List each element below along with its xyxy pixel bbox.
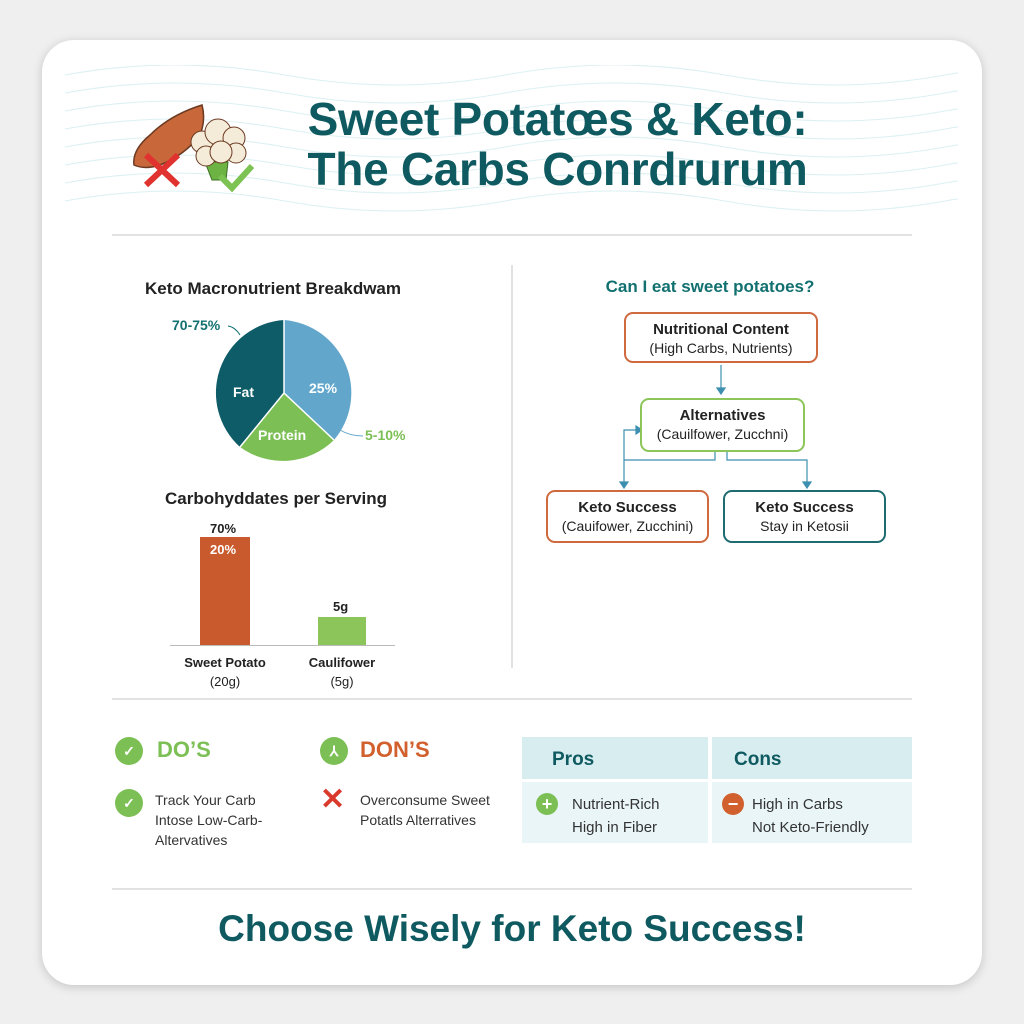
pros cons table: [522, 737, 912, 843]
box: keto success right: [723, 490, 886, 543]
pie chart: Protein: [258, 427, 306, 443]
do's: Altervatives: [155, 832, 227, 848]
box: keto success left: Keto Success: [578, 499, 677, 516]
pie chart: 25%: [309, 380, 338, 396]
don'ts: ✕: [320, 783, 345, 816]
do's: ✓: [123, 795, 135, 811]
bar chart: 20%: [210, 542, 236, 557]
heading: macronutrient: Keto Macronutrient Breakdwam: [145, 279, 401, 298]
don'ts: [320, 737, 490, 828]
do's: Intose Low-Carb-: [155, 812, 262, 828]
title: The Carbs Conrdrurum: [307, 143, 808, 195]
do's: [115, 737, 262, 848]
bar chart: 70%: [210, 521, 236, 536]
icon: sweet potato and cauliflower: [133, 104, 254, 192]
pros cons table: +: [542, 794, 552, 814]
box: nutritional content: (High Carbs, Nutrients): [649, 340, 793, 356]
bar chart: Caulifower: [309, 655, 375, 670]
box: alternatives: (Cauilfower, Zucchni): [657, 426, 788, 442]
pros cons table: High in Carbs: [752, 796, 843, 813]
bar chart: (20g): [210, 674, 240, 689]
don'ts: Overconsume Sweet: [360, 792, 490, 808]
pie chart: 70-75%: [172, 317, 221, 333]
pros cons table: Pros: [552, 749, 594, 770]
box: nutritional content: [624, 312, 818, 363]
flowchart arrows: [619, 365, 812, 489]
header wave background: [65, 65, 958, 212]
title: [307, 93, 808, 195]
pie chart: 5-10%: [365, 427, 406, 443]
bar chart: Sweet Potato: [184, 655, 266, 670]
box: keto success right: Keto Success: [755, 499, 854, 516]
box: keto success right: Stay in Ketosii: [760, 518, 849, 534]
title: Sweet Potatœs & Keto:: [308, 93, 807, 145]
footer tagline: Choose Wisely for Keto Success!: [218, 908, 806, 949]
do's: DO’S: [157, 737, 211, 762]
don'ts: Potatls Alterratives: [360, 812, 476, 828]
box: keto success left: (Cauifower, Zucchini): [562, 518, 693, 534]
pie chart: [172, 317, 406, 461]
box: alternatives: Alternatives: [680, 407, 765, 424]
pros cons table: Cons: [734, 749, 782, 770]
box: nutritional content: Nutritional Content: [653, 321, 789, 338]
heading: carbs per serving: Carbohyddates per Serving: [165, 489, 387, 508]
don'ts: DON’S: [360, 737, 430, 762]
bar chart: [170, 521, 395, 689]
pros cons table: Not Keto-Friendly: [752, 819, 869, 836]
pros cons table: High in Fiber: [572, 819, 657, 836]
do's: ✓: [123, 743, 135, 759]
bar chart: 5g: [333, 599, 348, 614]
do's: Track Your Carb: [155, 792, 256, 808]
heading: can I eat: Can I eat sweet potatoes?: [606, 277, 814, 296]
pros cons table: −: [728, 794, 738, 814]
don'ts: ⅄: [330, 743, 338, 759]
pros cons table: Nutrient-Rich: [572, 796, 660, 813]
bar chart: (5g): [330, 674, 354, 689]
box: alternatives: [640, 398, 805, 452]
box: keto success left: [546, 490, 709, 543]
pie chart: Fat: [233, 384, 254, 400]
